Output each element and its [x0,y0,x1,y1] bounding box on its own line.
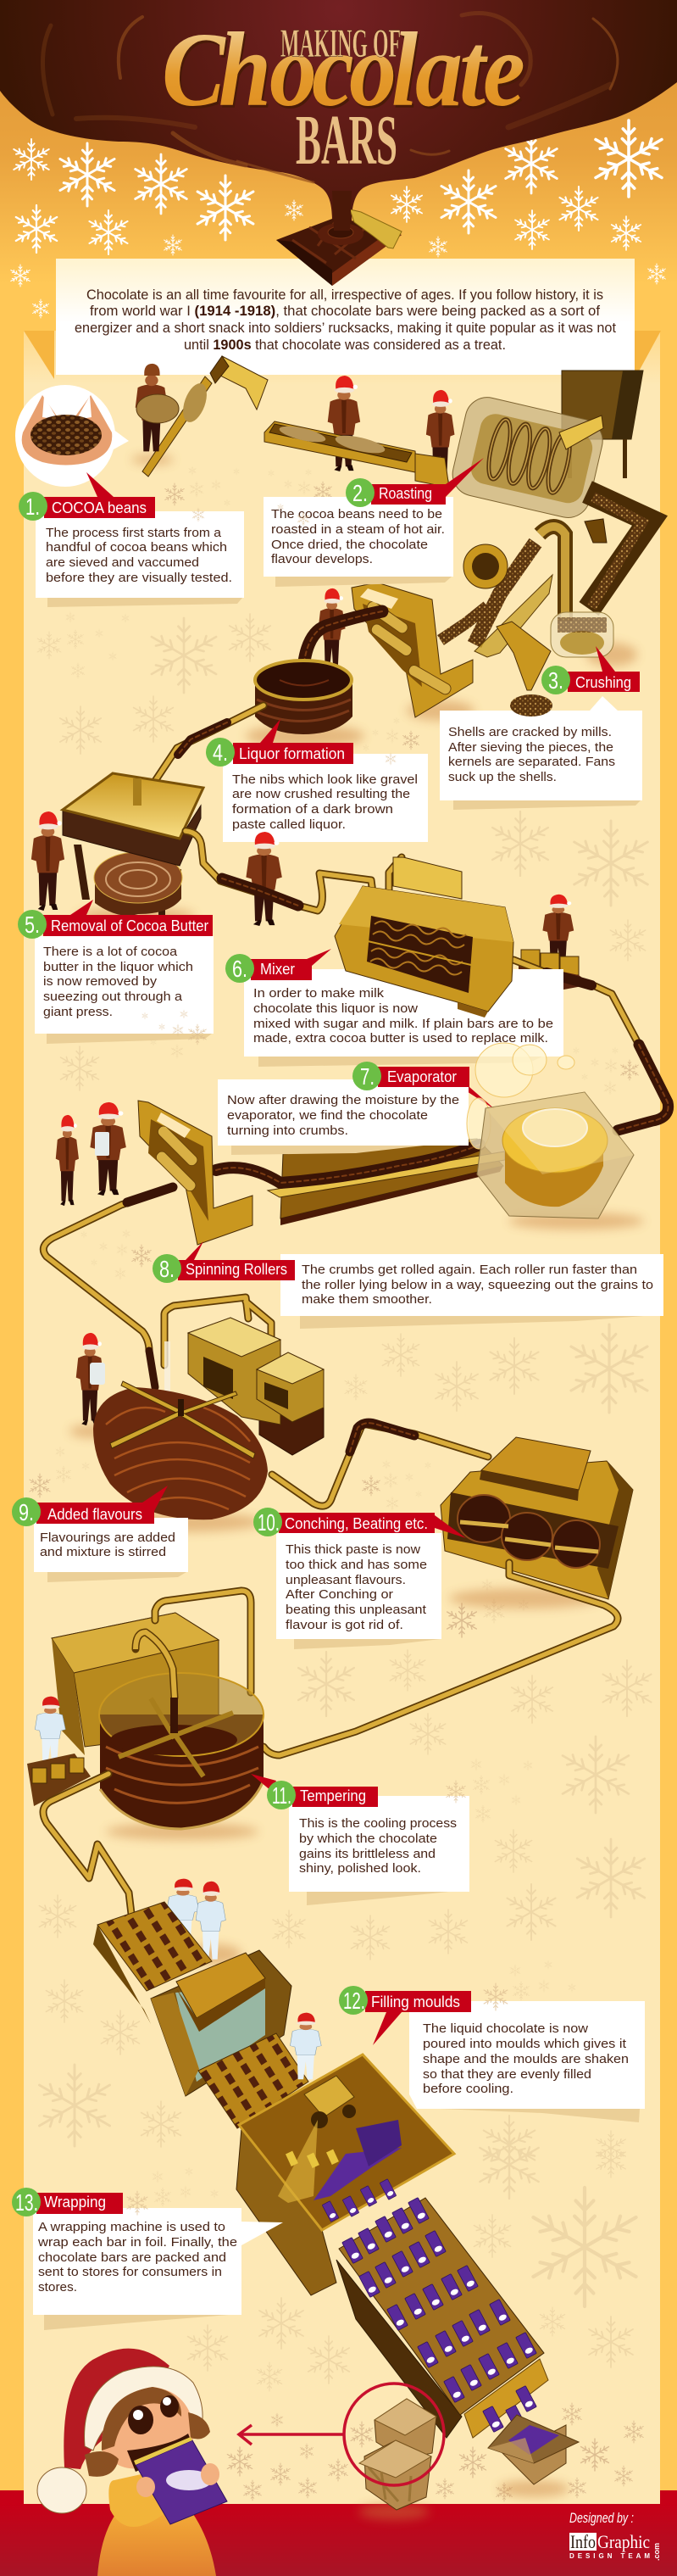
step 11: tempering: gains its brittleless and [299,1847,436,1861]
step 9: added flavours: and mixture is stirred [40,1545,166,1559]
step 4: liquor formation: The nibs which look like gravel [232,772,418,787]
step 2: roasting: flavour develops. [271,552,373,566]
panel: cream process area [24,331,661,2504]
machine: conche [441,1437,633,1599]
step 3: crushing: Crushing [575,674,631,691]
step 3: crushing: suck up the shells. [448,770,557,784]
machine: evaporator and steam [467,1043,634,1218]
step 10: conching, beating: Conching, Beating etc. [285,1515,428,1532]
step 13: wrapping: wrap each bar in foil. Finally, the [37,2235,237,2250]
step 5: removal of cocoa butter: giant press. [43,1005,113,1019]
machine: milk tanks [164,1297,324,1455]
step 9: added flavours [12,1486,188,1582]
step 13: wrapping: 13. [15,2189,38,2216]
step 11: tempering [251,1774,469,1905]
step 6: mixer: mixed with sugar and milk. If plain bars are to be [253,1017,553,1031]
step 13: wrapping: stores. [38,2280,77,2294]
step 4: liquor formation: formation of a dark brown [232,802,393,817]
pipe: flavour vat to conche [272,1423,488,1506]
step 4: liquor formation: paste called liquor. [232,817,346,832]
machine: bean conveyor with sack worker [136,356,268,477]
step 10: conching, beating: beating this unpleasant [286,1603,427,1617]
designer credit: DESIGN TEAM [569,2552,650,2560]
step 13: wrapping [12,2188,283,2330]
step 7: evaporator: 7. [360,1063,375,1090]
workers in white inspecting moulds [167,1879,225,1960]
step 1: cocoa beans: 1. [25,493,40,520]
step 12: filling moulds: shape and the moulds are shaken [423,2052,629,2066]
machine: evaporator trough [216,1139,505,1225]
step 2: roasting: 2. [352,480,368,506]
step 10: conching, beating: too thick and has some [286,1558,427,1572]
step 3: crushing: 3. [548,667,563,694]
pipe: mixer to evaporator [513,960,669,1130]
step 13: wrapping: A wrapping machine is used to [38,2220,225,2234]
pipe: conche to tempering [264,1563,618,1755]
step 7: evaporator: turning into crumbs. [227,1124,348,1138]
machine: cocoa bean trough with workers [264,376,454,482]
step 12: filling moulds: 12. [343,1988,365,2014]
step 12: filling moulds: so that they are evenly filled [423,2067,591,2082]
step 12: filling moulds: poured into moulds which gives it [423,2037,627,2051]
machine: flavour mixing vat with worker [76,1333,268,1519]
step 2: roasting: roasted in a steam of hot air. [271,522,445,537]
step 3: crushing [440,646,642,810]
step 11: tempering: 11. [272,1782,291,1809]
pipe: tempering to moulds [43,1774,131,1914]
step 6: mixer: Mixer [260,961,295,978]
machine: spinning rollers with two workers [56,1101,252,1245]
pile of crushed beans [510,694,552,716]
step 6: mixer: 6. [232,956,247,982]
step 7: evaporator [218,1062,496,1155]
step 7: evaporator: Now after drawing the moisture by the [227,1093,459,1107]
step 5: removal of cocoa butter: is now removed by [43,974,158,989]
step 4: liquor formation [206,719,428,842]
step 2: roasting: The cocoa beans need to be [271,507,442,521]
step 6: mixer: chocolate this liquor is now [253,1001,418,1016]
machine: mixer [335,857,513,1018]
step 13: wrapping: sent to stores for consumers in [38,2265,222,2279]
step 1: cocoa beans: COCOA beans [52,499,147,516]
step 4: liquor formation: are now crushed resulting the [232,787,410,801]
step 9: added flavours: Added flavours [47,1506,142,1523]
machine: tempering tank and vat [52,1591,264,1829]
highlight ring and arrow [239,2384,444,2485]
machine: liquor rollers and vat with worker [255,583,487,734]
step 4: liquor formation: 4. [213,739,228,766]
intro text box: Chocolate is an all time favourite for all, irrespective of ages. If you follow history, it is [86,287,603,303]
machine: cocoa butter press [31,773,203,916]
step 8: spinning rollers: make them smoother. [302,1292,432,1307]
step 10: conching, beating [253,1508,466,1649]
step 11: tempering: Tempering [300,1787,366,1804]
step 10: conching, beating: After Conching or [286,1587,393,1602]
step 7: evaporator: evaporator, we find the chocolate [227,1108,428,1123]
step 5: removal of cocoa butter: Removal of Cocoa Butter [51,917,208,934]
step 10: conching, beating: This thick paste is now [286,1542,420,1557]
girl eating chocolate bar [37,2349,227,2576]
step 11: tempering: by which the chocolate [299,1832,437,1846]
step 8: spinning rollers: Spinning Rollers [186,1261,287,1278]
machine: wrapped bars belt [336,2198,548,2438]
step 7: evaporator: Evaporator [387,1068,457,1085]
designer credit: Graphic [597,2531,650,2552]
worker in white coat with crates [27,1697,91,1806]
step 12: filling moulds: The liquid chocolate is now [423,2021,588,2036]
intro text box: from world war I (1914 -1918), that chocolate bars were being packed as a sort of [90,303,600,319]
step 1: cocoa beans: handful of cocoa beans which [46,540,227,555]
worker and crates at mixer [519,895,591,990]
pipe: rollers to flavour mixer [43,1187,173,1387]
title: BARS [296,101,397,180]
intro text box: energizer and a short snack into soldiers’ rucksacks, making it quite popular as it was not [75,320,616,336]
step 12: filling moulds: before cooling. [423,2082,513,2096]
step 11: tempering: This is the cooling process [299,1816,457,1831]
step 8: spinning rollers [153,1241,663,1329]
machine: moulding conveyor and cooler [93,1902,321,2128]
designer credit: Info [570,2531,596,2552]
step 3: crushing: After sieving the pieces, the [448,740,613,755]
step 2: roasting [264,458,484,587]
designer credit [569,2510,661,2561]
step 10: conching, beating: 10. [258,1509,280,1536]
pipe: press to mixer [186,831,402,911]
step 1: cocoa beans [15,385,244,607]
step 13: wrapping: Wrapping [44,2194,106,2211]
step 8: spinning rollers: the roller lying below in a way, squeezing out the grains to [302,1278,653,1292]
step 2: roasting: Roasting [379,485,432,502]
machine: roaster drum [415,371,643,543]
step 9: added flavours: Flavourings are added [40,1531,175,1545]
step 12: filling moulds [339,1986,645,2122]
open carton of wrapped bars [488,2415,579,2484]
step 8: spinning rollers: The crumbs get rolled again. Each roller run faster than [302,1263,637,1277]
machine: cracking chute, mill and sieve [463,492,650,690]
step 11: tempering: shiny, polished look. [299,1861,421,1876]
step 5: removal of cocoa butter: There is a lot of cocoa [43,945,178,959]
step 6: mixer: made, extra cocoa butter is used to replace milk. [253,1031,548,1045]
footer band [0,2490,677,2576]
step 5: removal of cocoa butter: butter in the liquor which [43,960,193,974]
step 5: removal of cocoa butter: sueezing out through a [43,990,183,1004]
step 13: wrapping: chocolate bars are packed and [38,2250,226,2265]
step 12: filling moulds: Filling moulds [371,1993,460,2010]
step 10: conching, beating: unpleasant flavours. [286,1573,406,1587]
designer credit: Designed by : [569,2510,634,2526]
stacked cartons [359,2399,436,2510]
step 1: cocoa beans: The process first starts from a [46,526,222,540]
step 1: cocoa beans: before they are visually tested. [46,571,232,585]
title [162,10,527,180]
machine: wrapper [236,2055,454,2295]
header: melted chocolate [0,0,677,222]
step 5: removal of cocoa butter: 5. [25,912,40,938]
step 3: crushing: kernels are separated. Fans [448,755,615,769]
step 1: cocoa beans: are sieved and vaccumed [46,555,199,570]
intro text box [56,259,635,375]
pipe: vat to press [155,705,264,781]
designer credit: .com [652,2543,661,2561]
intro text box: until 1900s that chocolate was considered as a treat. [184,337,506,353]
step 4: liquor formation: Liquor formation [239,745,345,762]
step 9: added flavours: 9. [19,1499,34,1525]
icon: handful of cocoa beans bubble [15,385,129,487]
step 6: mixer [225,949,563,1067]
step 10: conching, beating: flavour is got rid of. [286,1618,403,1632]
step 2: roasting: Once dried, the chocolate [271,538,428,552]
title: Chocolate [162,10,525,128]
worker at pipe below liquor step [222,832,298,926]
step 6: mixer: In order to make milk [253,986,385,1001]
step 8: spinning rollers: 8. [159,1256,175,1282]
title: Chocolate [164,13,527,131]
title: MAKING OF [280,21,401,66]
icon: chocolate bar with stream [276,191,402,286]
step 5: removal of cocoa butter [18,900,214,1044]
step 3: crushing: Shells are cracked by mills. [448,725,612,739]
